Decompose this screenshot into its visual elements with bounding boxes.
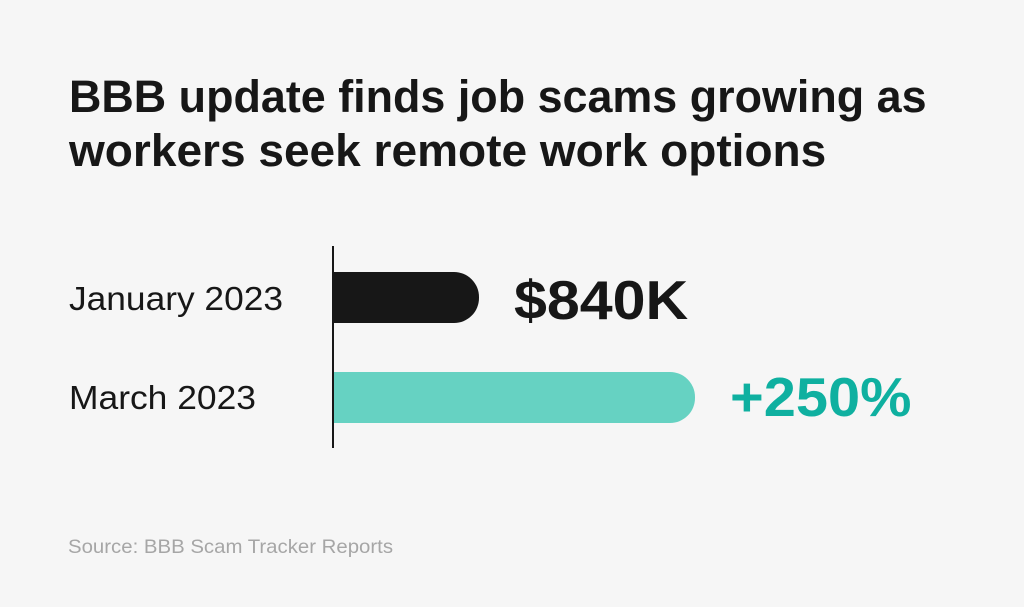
title: BBB update finds job scams growing as (69, 71, 927, 122)
title: workers seek remote work options (69, 125, 826, 176)
value: +250%: +250% (730, 366, 911, 428)
title (68, 71, 927, 176)
source note: Source: BBB Scam Tracker Reports (68, 536, 393, 558)
bar: March 2023 (333, 372, 695, 423)
label: March 2023: March 2023 (69, 380, 256, 417)
label: January 2023: January 2023 (69, 281, 283, 318)
axis line (332, 246, 334, 448)
bar: January 2023 (333, 272, 479, 323)
bar chart (69, 246, 911, 448)
value: $840K: $840K (514, 269, 688, 331)
